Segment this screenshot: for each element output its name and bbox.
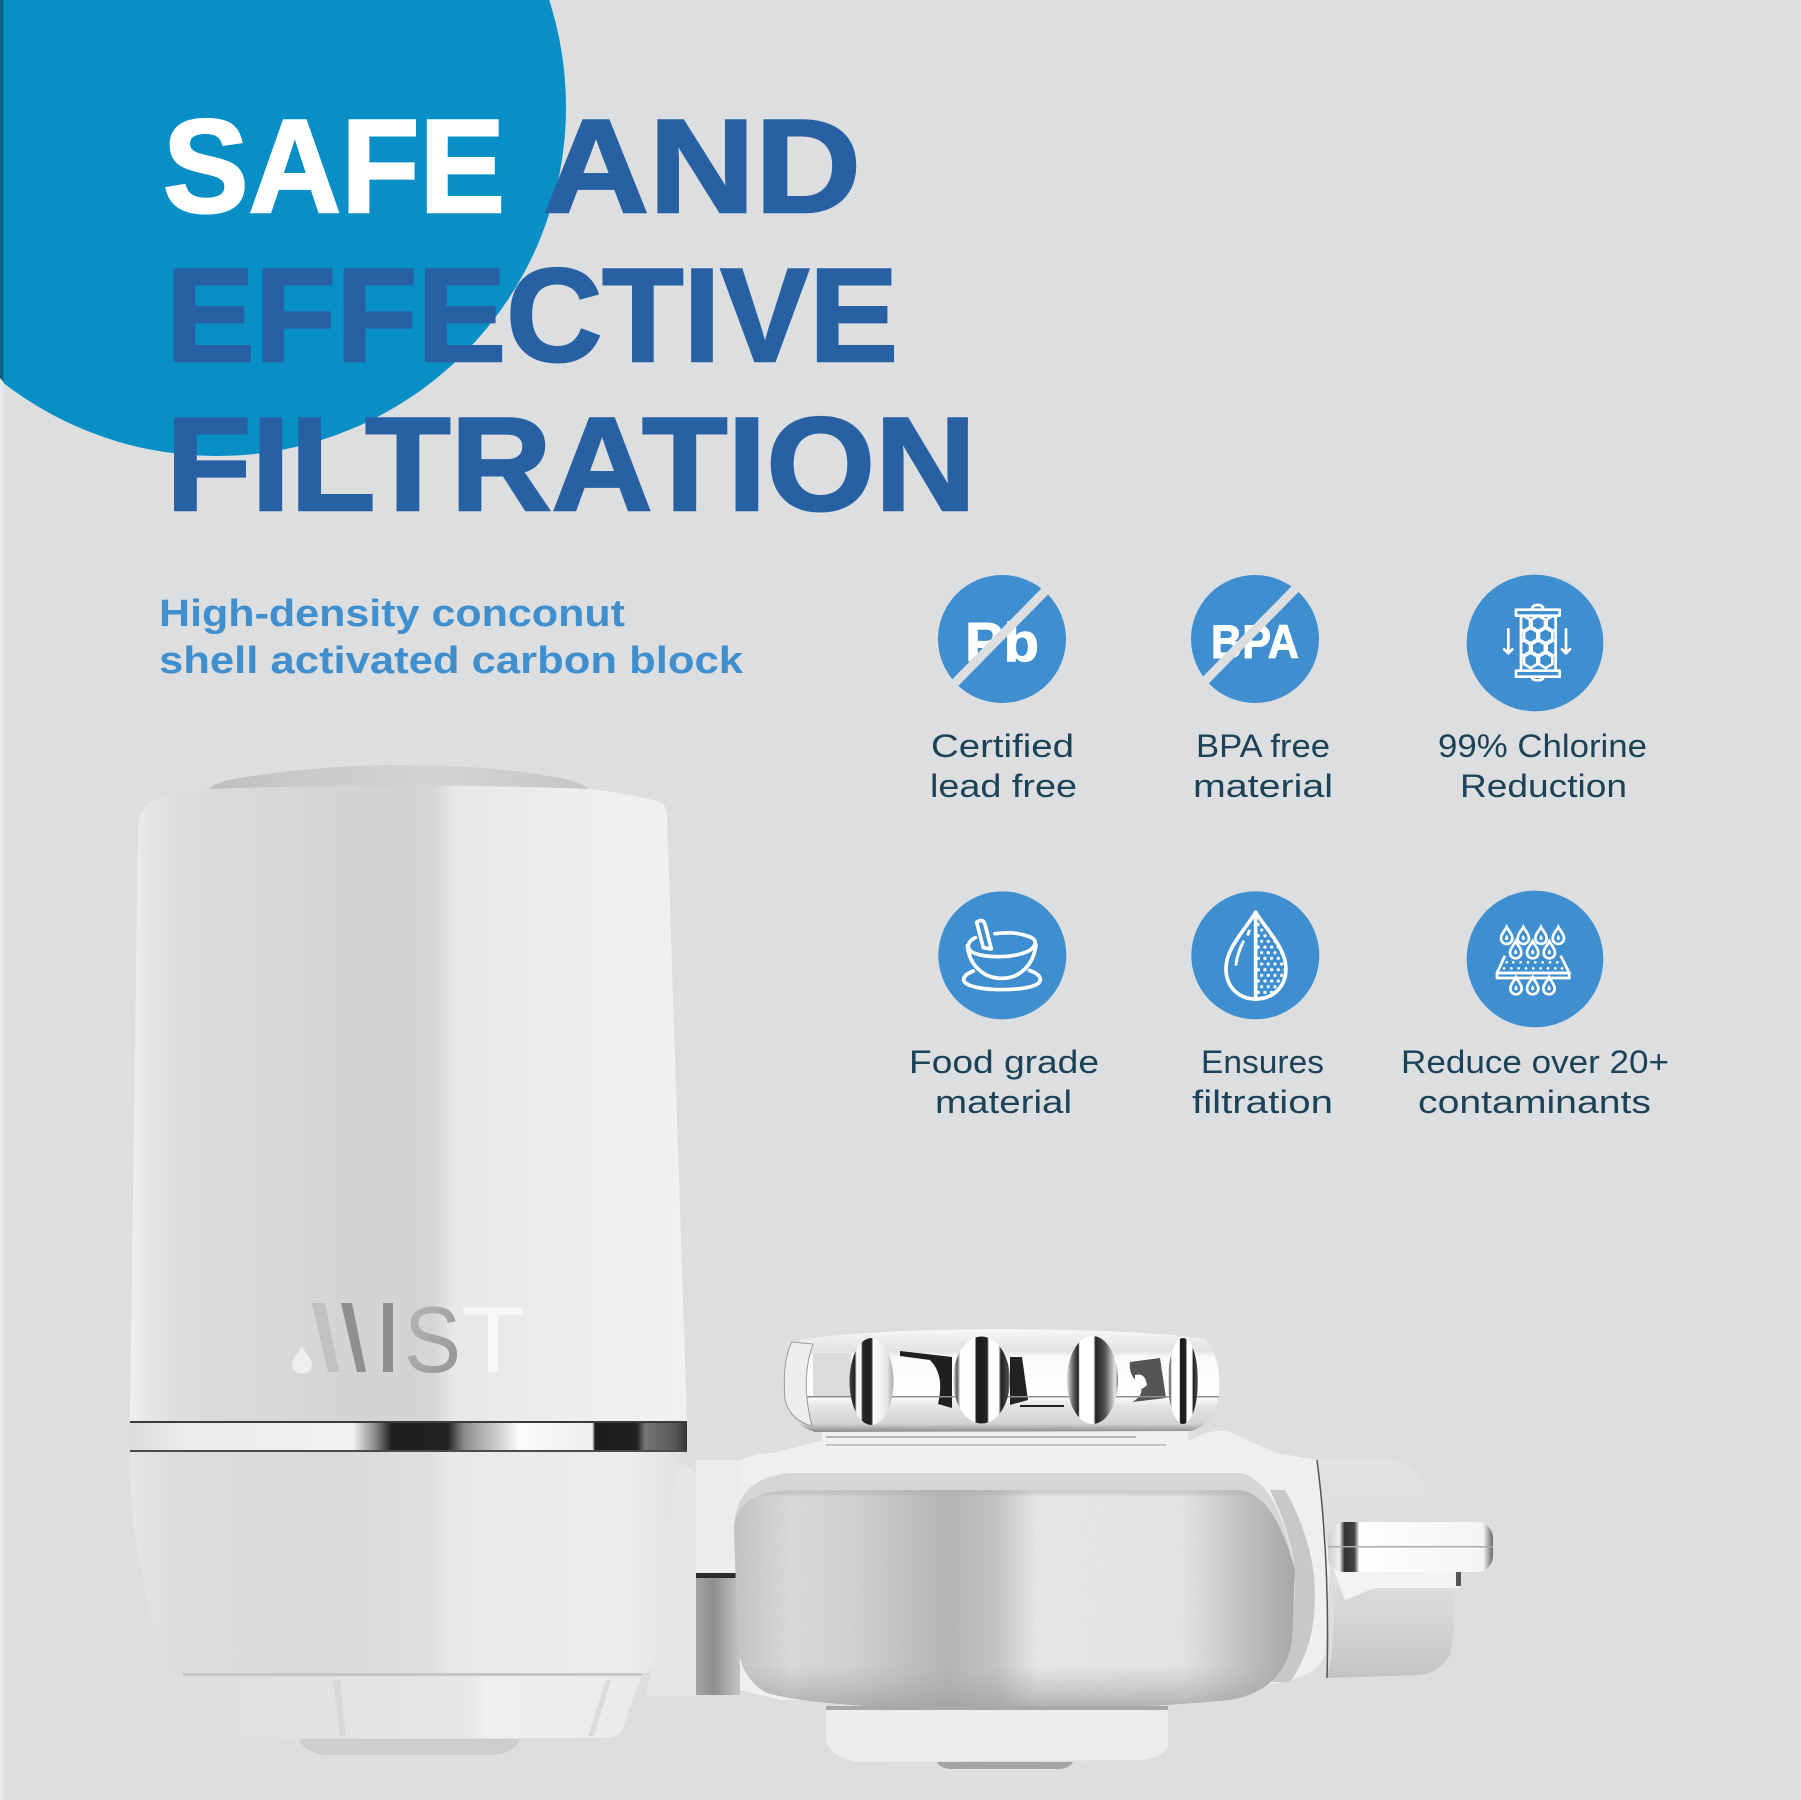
feature: BPA free — [1191, 575, 1333, 804]
title: SAFE — [163, 93, 505, 241]
icon: Pb crossed out — [938, 575, 1066, 703]
icon: filter cartridge — [1467, 575, 1603, 711]
metal body — [734, 1473, 1295, 1713]
subtitle — [159, 593, 744, 682]
label: reduce over 20+ contaminants: Reduce over 20+ — [1401, 1044, 1669, 1080]
label: food grade material: Food grade — [909, 1044, 1099, 1080]
collar — [1270, 1490, 1315, 1682]
label: reduce over 20+ contaminants: contaminants — [1418, 1084, 1651, 1120]
title: FILTRATION — [166, 391, 976, 539]
valve housing — [740, 1431, 1330, 1700]
label: certified lead free — [930, 728, 1077, 804]
decorative blue circle — [0, 0, 566, 456]
feature: certified lead free — [930, 575, 1077, 804]
cartridge base ring — [183, 1673, 642, 1738]
label: ensures filtration: filtration — [1192, 1084, 1333, 1120]
label: BPA free material: material — [1193, 768, 1333, 804]
left edge strip — [0, 0, 4, 1800]
label: BPA free material: BPA free — [1196, 728, 1330, 764]
label: BPA free material — [1193, 728, 1333, 804]
label: food grade material: material — [935, 1084, 1072, 1120]
label: certified lead free: lead free — [930, 768, 1077, 804]
icon: half-dotted water drop — [1191, 891, 1319, 1019]
label: certified lead free: Certified — [931, 728, 1074, 764]
subtitle: shell activated carbon block — [159, 640, 744, 682]
icon: BPA crossed out — [1191, 575, 1319, 703]
chrome dial — [784, 1329, 1219, 1432]
label: 99% chlorine reduction: 99% Chlorine — [1438, 728, 1647, 764]
label: ensures filtration: Ensures — [1201, 1044, 1324, 1080]
feature: chlorine reduction — [1438, 575, 1647, 804]
bottom outlet — [826, 1706, 1168, 1769]
cartridge lower body — [130, 1452, 680, 1673]
connector flange — [645, 1464, 696, 1696]
cartridge upper body — [130, 786, 687, 1421]
connector arm — [696, 1460, 746, 1695]
base ring shading — [183, 1673, 642, 1736]
label: ensures filtration — [1192, 1044, 1333, 1120]
feature: food grade — [909, 891, 1099, 1120]
product: faucet water filter — [130, 765, 1493, 1769]
label: reduce over 20+ contaminants — [1401, 1044, 1669, 1120]
feature: ensures filtration — [1191, 891, 1333, 1120]
chrome band — [130, 1421, 687, 1452]
label: 99% chlorine reduction — [1438, 728, 1647, 804]
icon: drops through filter — [1467, 891, 1603, 1027]
cartridge top cap — [207, 765, 592, 792]
right side block — [1317, 1460, 1461, 1678]
title: AND — [543, 93, 861, 241]
cartridge outlet — [299, 1739, 520, 1755]
brand logo: T — [461, 1287, 525, 1392]
filter cartridge — [130, 765, 687, 1755]
title — [163, 93, 976, 539]
chrome lever — [1328, 1522, 1493, 1572]
label: 99% chlorine reduction: Reduction — [1460, 768, 1627, 804]
title: EFFECTIVE — [166, 242, 898, 390]
subtitle: High-density conconut — [159, 593, 625, 635]
neck — [822, 1430, 1188, 1450]
icon: BPA crossed out: BPA — [1211, 615, 1299, 668]
brand logo: S — [404, 1287, 461, 1392]
label: food grade material — [909, 1044, 1099, 1120]
feature: contaminants — [1401, 891, 1669, 1120]
icon: Pb crossed out: Pb — [965, 611, 1039, 673]
icon: bowl and spoon — [938, 891, 1066, 1019]
brand logo — [292, 1287, 525, 1392]
